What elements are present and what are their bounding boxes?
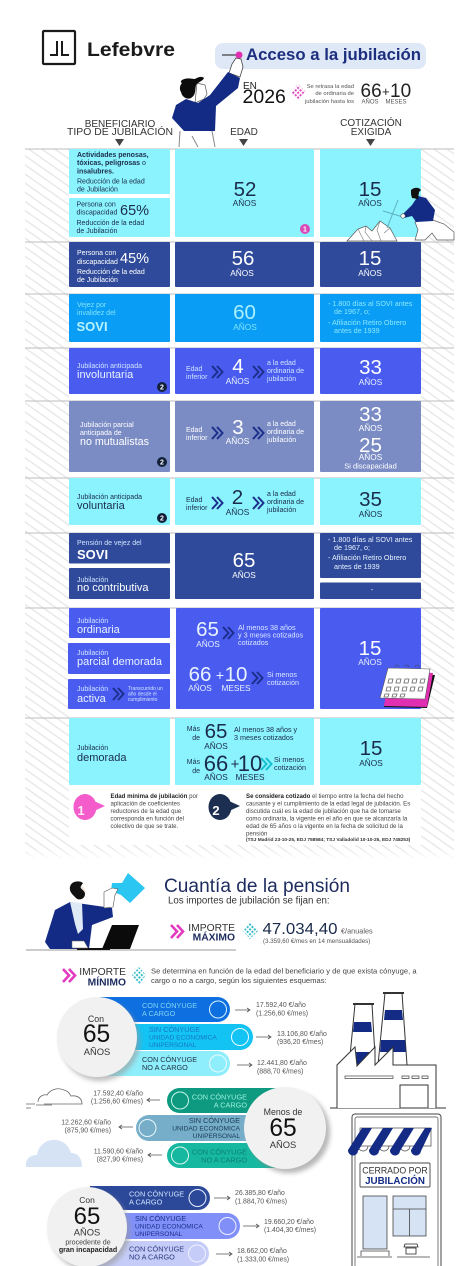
row: SOVI invalidez: AÑOS <box>233 322 257 332</box>
note 2: se considera cotizado: pensión <box>246 830 267 838</box>
pill: sin cónyuge: SIN CÓNYUGE <box>135 1214 186 1223</box>
row: discapacidad 45%: 15 <box>359 247 381 270</box>
row: anticipada involuntaria: inferior <box>186 374 208 381</box>
row: parcial anticipada no mutualistas: 33 <box>359 403 382 426</box>
cell: 15 años <box>320 149 421 237</box>
row: demorada: 15 <box>360 737 382 760</box>
pill: sin cónyuge: UNIDAD ECONÓMICA <box>172 1124 241 1132</box>
row: anticipada voluntaria: voluntaria <box>77 500 126 512</box>
row: anticipada involuntaria: 2 <box>160 384 164 392</box>
pill: con cónyuge a cargo: A CARGO <box>129 1198 163 1206</box>
note 2: se considera cotizado: edad de 65 años o la vigente en la fecha de solicitud de la <box>246 823 403 830</box>
cell: actividades penosas: Actividades penosas, <box>77 152 149 159</box>
row: ordinaria, parcial demorada, activa: parcial demorada <box>77 656 163 668</box>
row: discapacidad 45%: 45% <box>120 251 149 267</box>
row: demorada: MESES <box>235 772 265 782</box>
values: con 65 años: 13.106,80 €/año <box>277 1031 327 1038</box>
pill: con cónyuge no a cargo <box>167 1143 290 1168</box>
icon: calendar <box>380 665 435 708</box>
scheme: con 65 años procedente de gran incapacidad <box>47 1186 316 1266</box>
cell: discapacidad 65%: discapacidad <box>76 210 117 216</box>
row: anticipada involuntaria: 4 <box>232 355 244 378</box>
row: demorada: 65 <box>205 720 227 743</box>
values: con 65 años: (936,20 €/mes) <box>277 1039 323 1046</box>
importe máximo: 47.034,40 <box>262 921 338 938</box>
row: ordinaria, parcial demorada, activa: Jubilación <box>77 618 108 625</box>
row: actividades penosas and discapacidad 65% <box>69 149 421 237</box>
circle: con 65 años gran incapacidad: AÑOS <box>74 1226 100 1238</box>
row: demorada: de <box>192 768 200 775</box>
row: demorada: AÑOS <box>359 758 383 768</box>
row: demorada: 3 meses cotizados <box>234 733 294 742</box>
row: demorada: cotización <box>274 763 306 772</box>
scheme: menos de 65 años <box>61 1087 330 1173</box>
cell: actividades penosas: insalubres. <box>77 168 114 176</box>
row: demorada: Más <box>187 726 200 733</box>
values: con 65 años: (888,70 €/mes) <box>257 1068 303 1076</box>
heading: cuantía de la pensión <box>164 876 350 906</box>
row: parcial anticipada no mutualistas: Jubilación parcial <box>80 422 134 429</box>
cell: actividades penosas <box>69 149 170 194</box>
cell: discapacidad 65%: Reducción de la edad <box>76 220 144 227</box>
pill: sin cónyuge: UNIPERSONAL <box>149 1042 197 1049</box>
row: SOVI invalidez: de 1967, o; <box>334 307 370 316</box>
row: parcial anticipada no mutualistas: a la edad <box>267 421 296 428</box>
cell: 15 años: AÑOS <box>358 198 382 208</box>
row: anticipada voluntaria: 35 <box>359 488 382 511</box>
year callout: 2026: 66 <box>360 81 382 102</box>
year callout: 2026: EN <box>243 81 257 92</box>
pill: sin cónyuge: SIN CÓNYUGE <box>189 1116 240 1125</box>
pill: con cónyuge a cargo <box>167 1088 290 1113</box>
cell: actividades penosas: de Jubilación <box>77 186 118 194</box>
row: parcial anticipada no mutualistas: ordinaria de <box>267 429 304 436</box>
row: SOVI vejez and no contributiva: SOVI <box>77 547 108 562</box>
row: demorada: de <box>192 735 200 742</box>
row: parcial anticipada no mutualistas: 25 <box>359 434 382 457</box>
row: discapacidad 45%: AÑOS <box>230 268 254 278</box>
values: menos de 65 años: 11.590,60 €/año <box>94 1148 143 1156</box>
cell: actividades penosas: tóxicas, peligrosas o <box>77 160 146 167</box>
importe mínimo <box>63 966 417 988</box>
pill: sin cónyuge: UNIPERSONAL <box>135 1231 183 1238</box>
column header: edad: EDAD <box>230 127 258 138</box>
row: demorada <box>69 718 421 785</box>
values: menos de 65 años: (1.256,60 €/mes) <box>91 1098 143 1106</box>
importe mínimo: MÍNIMO <box>88 976 126 988</box>
row: discapacidad 45%: de Jubilación <box>77 277 118 284</box>
row: SOVI vejez and no contributiva: AÑOS <box>232 570 256 580</box>
scheme: con 65 años <box>57 997 327 1081</box>
row: parcial anticipada no mutualistas: AÑOS <box>226 436 250 446</box>
pill: con cónyuge a cargo: CON CÓNYUGE <box>129 1190 184 1198</box>
row: demorada: 66 <box>204 751 228 776</box>
row: ordinaria, parcial demorada, activa: + <box>216 667 224 683</box>
row: discapacidad 45% <box>69 242 421 287</box>
row: ordinaria, parcial demorada, activa: MESES <box>221 683 251 693</box>
row: SOVI invalidez: invalidez del <box>77 310 116 317</box>
sign: cerrado por jubilación <box>360 1163 430 1187</box>
note 1: edad mínima: aplicación de coeficientes <box>110 800 180 808</box>
illustration: closed shop <box>348 1114 441 1266</box>
year callout: 2026: AÑOS <box>361 98 379 106</box>
importe máximo <box>171 921 373 945</box>
row: demorada: AÑOS <box>204 741 228 751</box>
row: ordinaria, parcial demorada, activa: AÑOS <box>188 683 212 693</box>
row: ordinaria, parcial demorada, activa: Transcurrido un <box>128 686 163 692</box>
heading: cuantía de la pensión: Cuantía de la pensión <box>164 876 350 897</box>
values: menos de 65 años <box>61 1090 162 1164</box>
row: anticipada involuntaria: a la edad <box>267 360 296 367</box>
row: anticipada voluntaria: inferior <box>186 505 208 512</box>
note 1: edad mínima: 1 <box>77 803 85 818</box>
row: anticipada voluntaria <box>69 478 421 525</box>
icon: cloud filled <box>26 1140 82 1167</box>
row: SOVI vejez and no contributiva: no contributiva <box>77 582 149 594</box>
pill: con cónyuge no a cargo <box>90 1241 209 1266</box>
pill: con cónyuge no a cargo <box>100 1051 230 1076</box>
sign: cerrado por jubilación: JUBILACIÓN <box>365 1175 425 1187</box>
row: ordinaria, parcial demorada, activa: cotización <box>267 678 299 687</box>
row: ordinaria, parcial demorada, activa: y 3 meses cotizados <box>238 630 304 640</box>
column header: beneficiario: BENEFICIARIO <box>85 119 155 130</box>
cell: 52 años: AÑOS <box>233 198 257 208</box>
circle: con 65 años <box>57 997 140 1081</box>
cell: actividades penosas: Reducción de la edad <box>77 178 145 186</box>
pill: con cónyuge no a cargo: CON CÓNYUGE <box>192 1148 247 1156</box>
importe máximo: (3.359,60 €/mes en 14 mensualidades) <box>263 938 370 945</box>
column header: cotización: EXIGIDA <box>351 127 392 138</box>
note 2: se considera cotizado: Se considera cotizado el tiempo entre la fecha del hecho <box>246 793 404 800</box>
row: ordinaria, parcial demorada, activa: 10 <box>225 663 247 686</box>
row: ordinaria, parcial demorada, activa: 66 <box>189 663 211 686</box>
pill: sin cónyuge: UNIPERSONAL <box>193 1133 240 1140</box>
row: ordinaria, parcial demorada, activa: 65 <box>196 618 219 641</box>
importe mínimo: cargo o no a cargo, según los siguientes esquemas: <box>151 976 327 985</box>
year callout: 2026: jubilación hasta los <box>304 99 354 105</box>
row: ordinaria, parcial demorada, activa: año desde el <box>128 692 157 698</box>
year callout: 2026 <box>242 81 411 108</box>
importe máximo: IMPORTE <box>188 923 235 934</box>
icon: cloud outline <box>26 1089 82 1108</box>
note 2: se considera cotizado: 2 <box>212 803 220 818</box>
row: parcial anticipada no mutualistas: no mutualistas <box>80 436 149 448</box>
row: SOVI vejez and no contributiva <box>69 533 421 599</box>
values: gran incapacidad <box>214 1190 316 1264</box>
column header: beneficiario: TIPO DE JUBILACIÓN <box>67 125 173 138</box>
row: parcial anticipada no mutualistas: jubilación <box>266 437 296 444</box>
importe mínimo: Se determina en función de la edad del beneficiario y de que exista cónyuge, a <box>151 966 417 976</box>
year callout: 2026: 10 <box>390 81 411 102</box>
row: anticipada voluntaria: jubilación <box>266 507 296 514</box>
cell: 52 años: 1 <box>303 226 307 234</box>
row: ordinaria, parcial demorada, activa: ordinaria <box>77 624 121 636</box>
row: SOVI vejez and no contributiva: - 1.800 días al SOVI antes <box>328 535 413 544</box>
values: con 65 años: 17.592,40 €/año <box>256 1002 306 1009</box>
row: discapacidad 45%: Persona con <box>77 250 116 257</box>
row: discapacidad 45%: 56 <box>232 247 254 270</box>
values: menos de 65 años: 17.592,40 €/año <box>93 1090 143 1098</box>
row: demorada: 10 <box>238 751 262 776</box>
row: SOVI vejez and no contributiva: Pensión de vejez del <box>77 540 142 547</box>
row: SOVI vejez and no contributiva: de 1967, o; <box>334 543 370 552</box>
row: discapacidad 45%: AÑOS <box>358 268 382 278</box>
row: anticipada voluntaria: 2 <box>160 516 164 522</box>
circle: con 65 años: 65 <box>83 1021 110 1048</box>
row: ordinaria, parcial demorada, activa: Jubilación <box>77 650 108 657</box>
note 2: se considera cotizado: (TSJ Madrid 23-10-25, EDJ 758584; TSJ Valladolid 10-10-25, EDJ 748253) <box>246 837 411 843</box>
cell: discapacidad 65%: 65% <box>120 203 149 219</box>
year callout: 2026: de ordinaria de <box>315 91 354 97</box>
pill: sin cónyuge <box>136 1115 290 1141</box>
importe mínimo: IMPORTE <box>79 967 126 978</box>
importe máximo: MÁXIMO <box>193 930 235 944</box>
row: anticipada voluntaria: Edad <box>186 497 202 504</box>
illustration: factory <box>330 993 446 1108</box>
row: ordinaria, parcial demorada, activa: Si menos <box>267 670 297 679</box>
row: anticipada involuntaria: jubilación <box>266 376 296 383</box>
row: SOVI invalidez: - 1.800 días al SOVI antes <box>328 299 413 308</box>
year callout: 2026: 2026 <box>242 86 286 108</box>
values: con 65 años: (1.256,60 €/mes) <box>256 1010 308 1018</box>
pill: con cónyuge a cargo: CON CÓNYUGE <box>192 1092 247 1102</box>
column header: edad <box>230 127 258 146</box>
row: anticipada involuntaria: 33 <box>359 356 382 379</box>
row: anticipada voluntaria: AÑOS <box>226 507 250 517</box>
circle: con 65 años gran incapacidad: 65 <box>74 1203 100 1230</box>
values: gran incapacidad: 18.662,00 €/año <box>237 1248 287 1255</box>
row: SOVI invalidez: Vejez por <box>77 302 107 309</box>
pill: sin cónyuge: UNIDAD ECONÓMICA <box>135 1222 203 1230</box>
heading: cuantía de la pensión: Los importes de jubilación se fijan en: <box>168 896 330 906</box>
note 2: se considera cotizado: causante y el cumplimiento de la edad legal de jubilación. Es <box>246 800 410 808</box>
circle: con 65 años: AÑOS <box>84 1046 110 1057</box>
row: ordinaria, parcial demorada, activa: cumplimiento <box>128 697 158 703</box>
row: SOVI vejez and no contributiva: antes de 1939 <box>334 562 380 571</box>
row: discapacidad 45%: Reducción de la edad <box>77 269 145 276</box>
cell: discapacidad 65%: Persona con <box>76 202 116 208</box>
row: anticipada voluntaria: Jubilación anticipada <box>77 494 142 501</box>
circle: con 65 años gran incapacidad: procedente de <box>65 1238 111 1246</box>
circle: con 65 años gran incapacidad: gran incapacidad <box>59 1246 117 1254</box>
pill: con cónyuge a cargo <box>100 997 230 1022</box>
row: anticipada involuntaria: AÑOS <box>359 377 383 387</box>
column header: beneficiario <box>67 119 173 146</box>
row: parcial anticipada no mutualistas: 3 <box>232 416 244 439</box>
row: SOVI vejez and no contributiva: Jubilación <box>77 577 108 584</box>
illustration: worker with pickaxe <box>347 188 454 241</box>
note 2: se considera cotizado: discutida cuál es la edad de jubilación que ha de tomarse <box>246 808 401 815</box>
circle: menos de 65 años <box>244 1087 330 1173</box>
row: anticipada involuntaria: involuntaria <box>77 369 134 381</box>
year callout: 2026: + <box>382 84 390 99</box>
cell: discapacidad 65% <box>69 198 170 237</box>
column header: cotización <box>340 116 402 146</box>
row: demorada: AÑOS <box>204 772 228 782</box>
row: demorada: demorada <box>77 752 127 764</box>
row: SOVI invalidez: SOVI <box>76 319 108 334</box>
row: SOVI invalidez: 60 <box>233 301 256 324</box>
row: parcial anticipada no mutualistas: Si discapacidad <box>344 462 397 470</box>
note 1: edad mínima: colectivo de que se trate. <box>110 823 179 830</box>
note 1: edad mínima: corresponda en función del <box>110 816 184 822</box>
values: gran incapacidad: (1.333,00 €/mes) <box>237 1256 289 1264</box>
row: ordinaria, parcial demorada, activa: Al menos 38 años <box>238 623 296 632</box>
row: parcial anticipada no mutualistas: 2 <box>160 460 164 466</box>
pill: sin cónyuge: SIN CÓNYUGE <box>149 1025 200 1034</box>
values: menos de 65 años: 12.262,60 €/año <box>61 1120 111 1126</box>
circle: menos de 65 años: AÑOS <box>270 1139 296 1150</box>
row: anticipada involuntaria <box>69 348 421 394</box>
row: anticipada involuntaria: AÑOS <box>226 376 250 386</box>
row: anticipada involuntaria: ordinaria de <box>267 368 304 375</box>
pill: con cónyuge no a cargo: NO A CARGO <box>129 1252 175 1262</box>
row: ordinaria, parcial demorada, activa <box>68 608 421 709</box>
row: SOVI vejez and no contributiva: - <box>371 587 374 594</box>
values: menos de 65 años: (827,90 €/mes) <box>97 1156 143 1164</box>
row: demorada: Jubilación <box>77 745 108 752</box>
circle: con 65 años gran incapacidad <box>47 1187 130 1266</box>
row: demorada: Más <box>187 759 200 766</box>
row: parcial anticipada no mutualistas: AÑOS <box>359 452 383 462</box>
pill: sin cónyuge <box>120 1024 253 1050</box>
row: SOVI vejez and no contributiva: - Afiliación Retiro Obrero <box>328 553 406 562</box>
row: ordinaria, parcial demorada, activa: AÑOS <box>196 639 220 649</box>
cell: discapacidad 65%: de Jubilación <box>76 228 117 235</box>
logo <box>43 31 175 64</box>
circle: menos de 65 años: 65 <box>269 1115 297 1142</box>
column header: cotización: COTIZACIÓN <box>340 116 402 129</box>
row: SOVI invalidez: antes de 1939 <box>334 326 380 335</box>
row: parcial anticipada no mutualistas <box>69 401 421 472</box>
illustration: woman pointing <box>172 58 243 147</box>
logo: Lefebvre <box>87 40 175 61</box>
row: ordinaria, parcial demorada, activa: Jubilación <box>77 686 108 693</box>
note 2: se considera cotizado: como ordinaria, la vigente en el año en que se alcanzaría la <box>246 816 408 822</box>
hatched table background <box>25 149 454 860</box>
note 1: edad mínima <box>74 793 198 830</box>
note 1: edad mínima: Edad mínima de jubilación por <box>110 793 198 800</box>
sign: cerrado por jubilación: CERRADO POR <box>362 1166 428 1176</box>
year callout: 2026: Se retrasa la edad <box>307 84 354 90</box>
pill: con cónyuge a cargo: A CARGO <box>214 1100 247 1110</box>
row: demorada: Al menos 38 años y <box>234 725 298 734</box>
title: Acceso a la jubilación: Acceso a la jubilación <box>246 45 421 64</box>
row: SOVI invalidez <box>69 294 421 342</box>
cell: 52 años <box>175 149 314 237</box>
cell: 15 años: 15 <box>359 178 381 201</box>
pill: con cónyuge a cargo: A CARGO <box>142 1009 176 1018</box>
values: gran incapacidad: (1.884,70 €/mes) <box>235 1198 287 1206</box>
row: ordinaria, parcial demorada, activa: cotizados <box>238 638 269 647</box>
row: SOVI invalidez: - Afiliación Retiro Obrero <box>328 318 406 327</box>
importe máximo: €/anuales <box>341 926 373 936</box>
row: ordinaria, parcial demorada, activa: 15 <box>359 637 381 660</box>
row: anticipada voluntaria: AÑOS <box>359 509 383 519</box>
pill: sin cónyuge <box>110 1213 240 1239</box>
note 2: se considera cotizado <box>208 793 411 843</box>
circle: con 65 años gran incapacidad: Con <box>79 1195 95 1205</box>
row: ordinaria, parcial demorada, activa: AÑOS <box>358 657 382 667</box>
pill: con cónyuge a cargo <box>90 1186 210 1210</box>
row: demorada: + <box>231 756 240 773</box>
year callout: 2026: MESES <box>385 100 407 106</box>
row: parcial anticipada no mutualistas: anticipada de <box>80 430 122 437</box>
values: gran incapacidad: 19.660,20 €/año <box>264 1219 314 1226</box>
illustration: man at laptop <box>26 873 236 950</box>
pill: con cónyuge a cargo: CON CÓNYUGE <box>142 1001 197 1010</box>
row: anticipada voluntaria: a la edad <box>267 491 296 498</box>
values: con 65 años: 12.441,80 €/año <box>257 1060 307 1067</box>
circle: con 65 años: Con <box>88 1014 104 1024</box>
row: parcial anticipada no mutualistas: inferior <box>186 435 208 442</box>
row: discapacidad 45%: discapacidad <box>77 259 118 266</box>
row: SOVI vejez and no contributiva: 65 <box>233 549 255 572</box>
note 1: edad mínima: reductores de la edad que <box>110 808 182 815</box>
circle: menos de 65 años: Menos de <box>264 1107 302 1117</box>
pill: con cónyuge no a cargo: CON CÓNYUGE <box>142 1055 197 1064</box>
row: anticipada involuntaria: Edad <box>186 366 202 373</box>
values: gran incapacidad: (1.404,30 €/mes) <box>264 1227 316 1234</box>
pill: con cónyuge no a cargo: NO A CARGO <box>201 1156 247 1164</box>
cell: 52 años: 52 <box>234 178 256 201</box>
values: menos de 65 años: (875,90 €/mes) <box>65 1128 111 1134</box>
values: con 65 años <box>235 1002 327 1076</box>
row: anticipada involuntaria: Jubilación anticipada <box>77 363 142 370</box>
row: ordinaria, parcial demorada, activa: activa <box>77 693 107 705</box>
row: anticipada voluntaria: 2 <box>232 486 243 509</box>
row: parcial anticipada no mutualistas: AÑOS <box>359 423 383 433</box>
title: Acceso a la jubilación <box>215 43 426 69</box>
row: anticipada voluntaria: ordinaria de <box>267 499 304 506</box>
row: parcial anticipada no mutualistas: Edad <box>186 427 202 434</box>
pill: sin cónyuge: UNIDAD ECONÓMICA <box>149 1032 217 1042</box>
pill: con cónyuge no a cargo: CON CÓNYUGE <box>129 1244 184 1254</box>
values: gran incapacidad: 26.385,80 €/año <box>235 1190 285 1197</box>
pill: con cónyuge no a cargo: NO A CARGO <box>142 1063 188 1072</box>
row: demorada: Si menos <box>274 755 304 764</box>
